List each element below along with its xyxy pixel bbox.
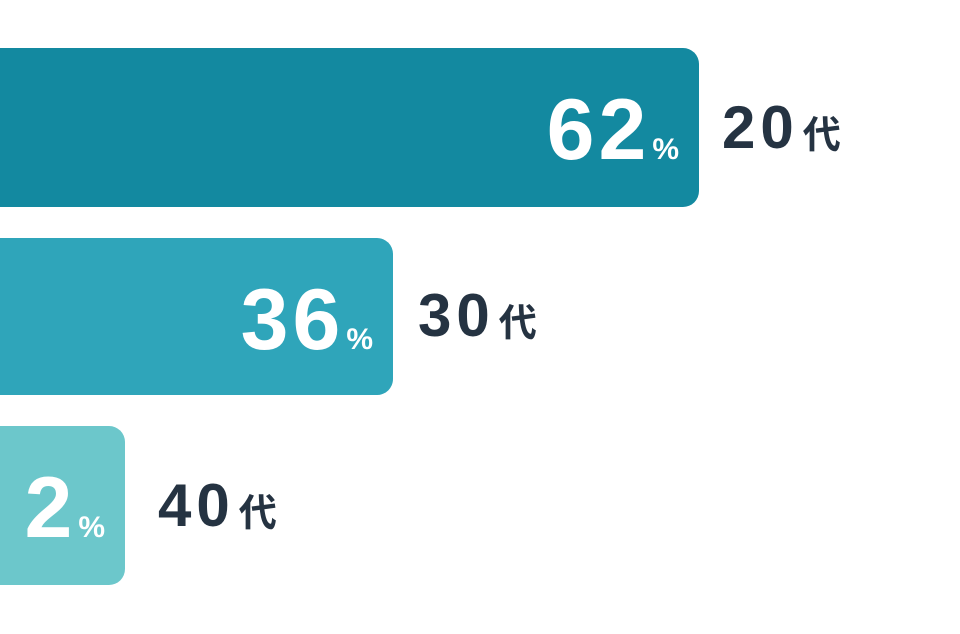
label: 20s: 20代 bbox=[722, 94, 841, 161]
value: 36%: 36% bbox=[241, 272, 373, 368]
value: 2%: 2% bbox=[24, 460, 105, 556]
label: 30s: 30代 bbox=[418, 282, 537, 349]
bar: 30s bbox=[0, 238, 393, 395]
label: 40s: 40代 bbox=[158, 472, 277, 539]
value: 62%: 62% bbox=[547, 82, 679, 178]
bar: 20s bbox=[0, 48, 699, 207]
bar: 40s bbox=[0, 426, 125, 585]
